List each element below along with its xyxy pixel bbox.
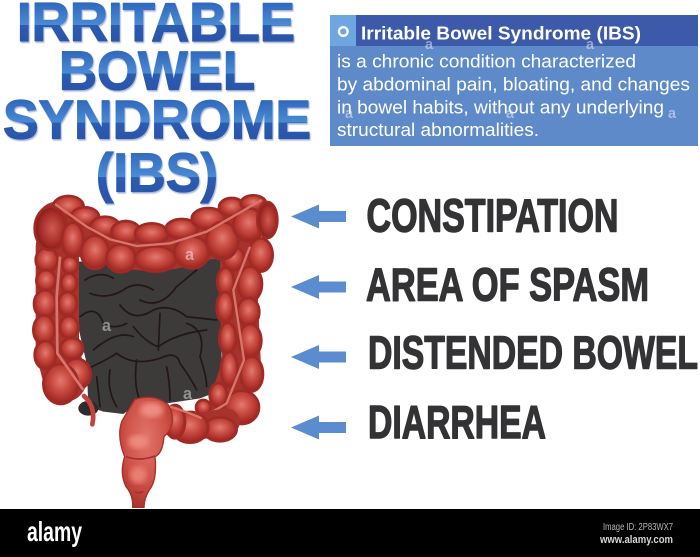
watermarks: a (185, 245, 195, 264)
label: diarrhea: DIARRHEA (368, 396, 546, 448)
watermarks: a (586, 36, 595, 53)
ascending colon (33, 247, 91, 404)
small intestine (77, 258, 222, 416)
watermarks: a (183, 384, 193, 403)
label: constipation: CONSTIPATION (366, 190, 618, 242)
arrow: distended bowel (291, 345, 346, 369)
title (3, 0, 311, 204)
footer url: www.alamy.com (599, 534, 673, 546)
panel body text: is a chronic condition characterized (337, 50, 636, 72)
panel body text (337, 50, 690, 140)
arrow: constipation (291, 204, 346, 228)
panel body text: by abdominal pain, bloating, and changes (337, 74, 690, 94)
title: SYNDROME (3, 88, 311, 150)
panel heading: Irritable Bowel Syndrome (IBS) (361, 24, 641, 44)
watermarks: a (425, 36, 434, 53)
arrow: diarrhea (291, 416, 346, 440)
watermarks (102, 36, 677, 403)
panel body text: in bowel habits, without any underlying (337, 96, 664, 118)
rectum (120, 397, 172, 507)
title: BOWEL (59, 40, 255, 102)
panel header bar (356, 15, 698, 46)
illustration: colon and small intestine (33, 195, 277, 507)
panel body text: structural abnormalities. (337, 119, 539, 140)
title: (IBS) (96, 142, 218, 204)
watermarks: a (668, 105, 677, 122)
watermarks: a (506, 105, 515, 122)
watermarks: a (102, 316, 112, 335)
icon tab (330, 15, 356, 46)
footer logo: alamy (27, 516, 82, 547)
footer bar (0, 509, 700, 557)
transverse colon (35, 195, 277, 272)
sigmoid colon (165, 405, 237, 443)
panel: definition (330, 15, 698, 146)
appendix (84, 396, 93, 424)
arrow: area of spasm (291, 275, 346, 299)
image id: Image ID: 2P83WX7 (603, 522, 673, 533)
descending colon (170, 238, 273, 424)
watermarks: a (345, 105, 354, 122)
